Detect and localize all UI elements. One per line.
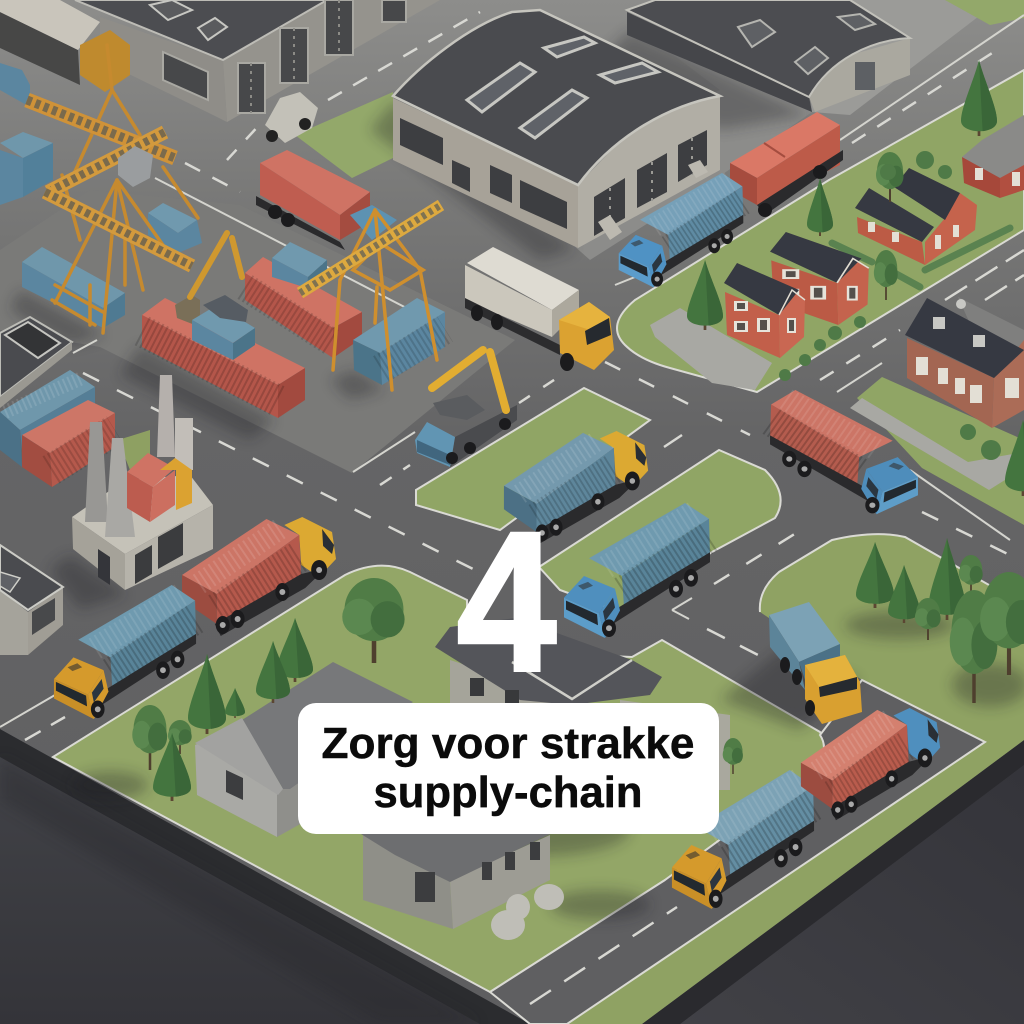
- truck: bottom right red with blue cab: [801, 708, 940, 820]
- truck: center right blue: [564, 503, 710, 638]
- truck: white container: [465, 247, 614, 371]
- upper concrete apron: [500, 20, 812, 260]
- truck: right blue with yellow cab: [769, 602, 862, 724]
- hedge row: [832, 228, 1010, 287]
- factory with chimneys: [72, 375, 213, 590]
- container: blue behind crane: [148, 203, 202, 253]
- driveway: right house: [850, 398, 1024, 490]
- house: neighbourhood 2: [770, 232, 869, 325]
- container: left red: [22, 400, 115, 487]
- container stack: red middle: [245, 257, 362, 358]
- trees: bottom left lawn: [132, 578, 743, 801]
- lawn: top patch: [295, 92, 393, 178]
- van: white: [265, 92, 318, 143]
- crane cabin: [118, 146, 153, 187]
- house: neighbourhood far right: [962, 115, 1024, 198]
- truck: red with yellow cab: [182, 517, 336, 636]
- truck: blue container top: [619, 173, 743, 287]
- trailer: red top: [730, 112, 843, 217]
- board left side wall: [0, 729, 530, 1024]
- lawn: bottom large: [53, 566, 824, 992]
- truck: bottom blue with yellow cab: [672, 770, 814, 909]
- caption line 2: supply-chain: [374, 768, 642, 817]
- truck: red trailer upper yard: [256, 150, 397, 250]
- shadow below board: [0, 757, 480, 1024]
- container: blue right of yard: [353, 298, 445, 385]
- building: behind label: [435, 618, 730, 790]
- loading docks: [598, 160, 708, 240]
- road edge lines: [0, 15, 1024, 727]
- caption box: [298, 703, 719, 834]
- caption line 1: Zorg voor strakke: [322, 719, 694, 768]
- building: left lower: [0, 545, 63, 655]
- road: bottom right: [490, 680, 985, 1024]
- lawn: left patch near factory: [118, 430, 150, 470]
- house: neighbourhood 3: [855, 168, 977, 265]
- lawn: right and bottom right strip: [567, 534, 1024, 1024]
- container: blue on red stack: [272, 242, 327, 288]
- container: left blue: [0, 370, 95, 467]
- house: neighbourhood 1: [724, 263, 805, 358]
- building: bottom center: [361, 834, 550, 929]
- lawn: top right neighbourhood: [617, 70, 1024, 392]
- truck: top left container: [0, 0, 130, 92]
- warehouse: center: [393, 10, 720, 248]
- hedges: [779, 151, 1001, 460]
- lawn: center: [416, 388, 650, 530]
- container: small blue under excavator: [192, 305, 255, 360]
- big number 4: 4: [457, 490, 556, 712]
- board right side wall: [642, 740, 1024, 1024]
- warehouse: top left: [75, 0, 440, 122]
- right apron: [800, 0, 1000, 115]
- truck: center blue with yellow cab: [504, 431, 648, 543]
- lawn edge lines right: [760, 534, 1024, 612]
- lawn: top right corner: [945, 0, 1024, 25]
- lawn: center right: [539, 450, 781, 612]
- container stacks: far left: [0, 63, 53, 205]
- concrete yard: [0, 190, 515, 473]
- excavator base: [175, 295, 200, 327]
- house: large brick: [905, 297, 1024, 428]
- crane: medium orange: [300, 205, 441, 390]
- truck: yellow crane: [415, 350, 517, 467]
- container stack: large red: [142, 298, 305, 418]
- driveway: neighbourhood: [650, 308, 772, 390]
- building: bottom grey house: [195, 662, 415, 837]
- truck: left blue with yellow cab: [54, 585, 196, 719]
- excavator: [190, 233, 248, 322]
- crane: large orange: [27, 45, 198, 333]
- background right: [680, 765, 1024, 1024]
- trees: neighbourhood and right lawn: [687, 60, 1024, 703]
- warehouse: top right: [627, 0, 910, 112]
- container stack: blue lower left yard: [22, 247, 125, 328]
- lawn: right house: [857, 377, 1024, 525]
- truck: red container right: [770, 390, 918, 514]
- building: left roof with vents: [0, 317, 72, 408]
- rocks: [491, 884, 564, 940]
